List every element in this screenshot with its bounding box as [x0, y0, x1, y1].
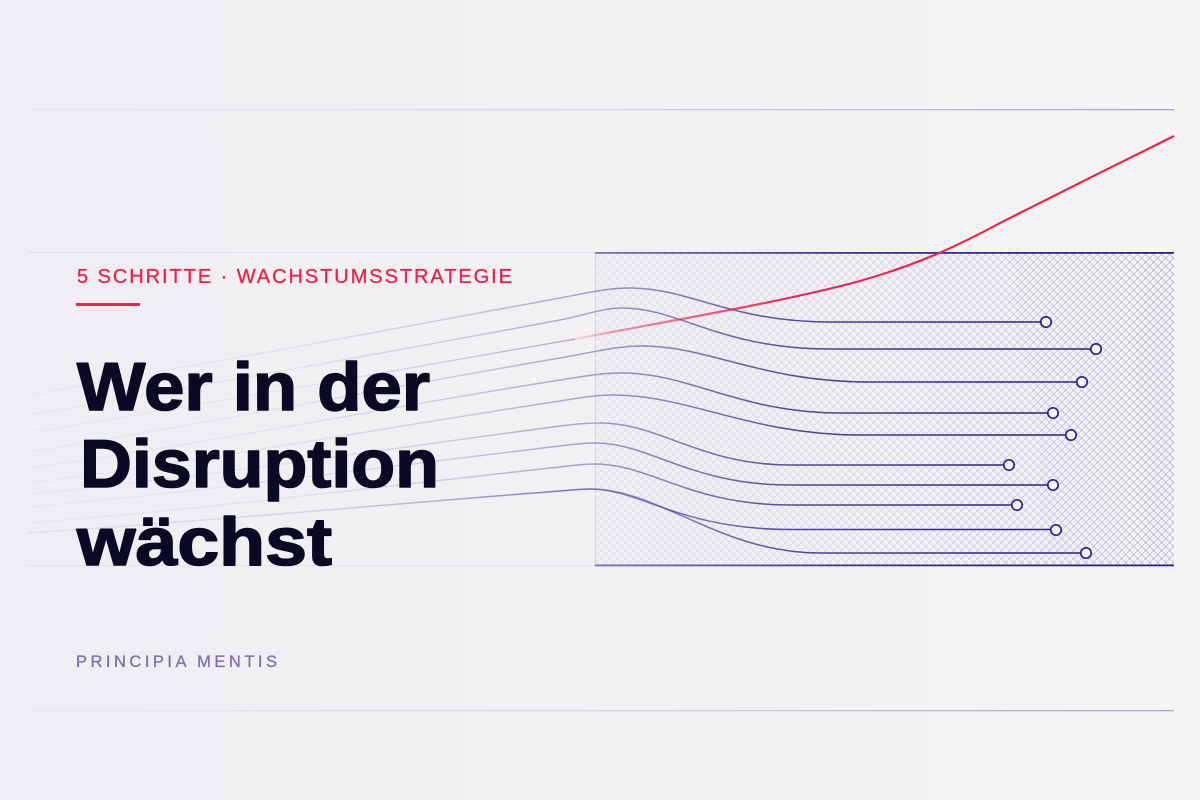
- title: [76, 349, 439, 580]
- panel top and bottom borders: [595, 252, 1174, 566]
- horizontal rules: [28, 109, 1174, 711]
- title: Wer in der: [77, 349, 430, 425]
- hatched panel: [595, 253, 1174, 565]
- endpoint markers: [1004, 317, 1101, 558]
- eyebrow: 5 SCHRITTE · WACHSTUMSSTRATEGIE: [77, 266, 512, 288]
- curves: ten paths converging into aligned lines: [28, 288, 1096, 553]
- title: wächst: [76, 504, 332, 580]
- title: Disruption: [80, 426, 439, 502]
- brand label: PRINCIPIA MENTIS: [76, 653, 277, 671]
- red growth curve: [565, 136, 1174, 341]
- accent bar: [76, 303, 140, 306]
